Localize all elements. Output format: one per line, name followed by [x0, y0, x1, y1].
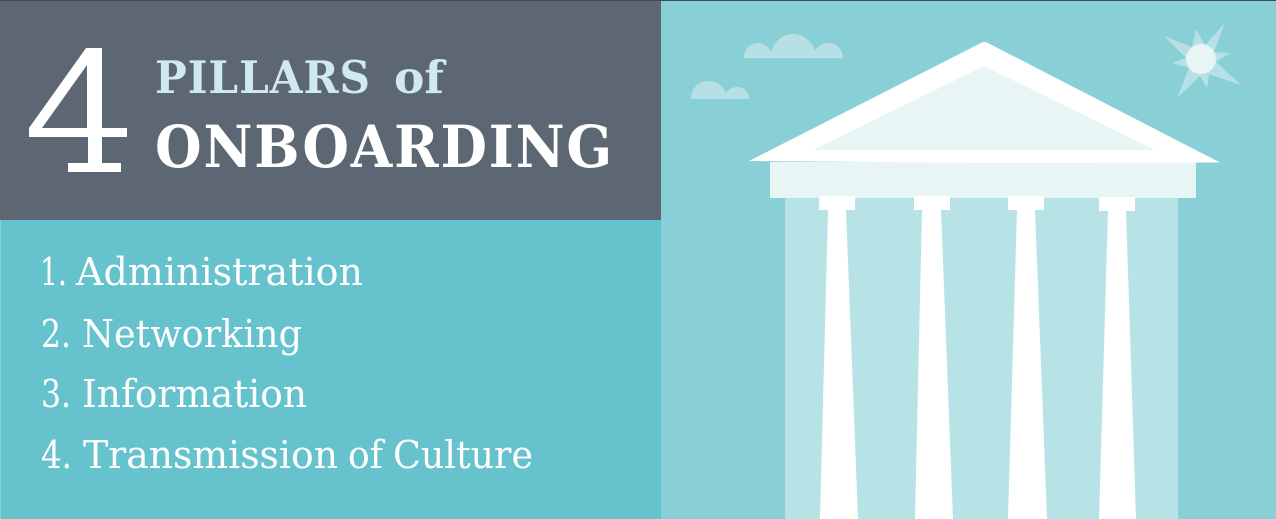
column 2: [914, 196, 953, 519]
list item 4: Culture: [393, 433, 533, 477]
list item 2: 2.: [41, 312, 71, 356]
panel: title background: [0, 1, 661, 220]
list item 4: 4.: [41, 433, 72, 477]
title line: pillars of: PILLARS: [155, 51, 371, 104]
list item 4: [41, 433, 533, 477]
temple pediment: [813, 66, 1155, 150]
list item 4: of: [348, 433, 386, 477]
temple: [749, 42, 1220, 519]
title line: pillars of: of: [394, 51, 447, 104]
panel: illustration background: [661, 0, 1276, 519]
list item 3: 3.: [41, 372, 71, 416]
icon: large cloud: [744, 34, 843, 58]
sun disc: [1186, 44, 1216, 74]
temple roof: [749, 42, 1220, 163]
icon: small cloud: [691, 81, 749, 99]
column 1: [819, 196, 858, 519]
temple entablature: [770, 162, 1196, 198]
list item 1: 1.: [40, 250, 67, 294]
title numeral 4: [29, 48, 127, 172]
column 3: [1008, 196, 1047, 519]
temple back wall: [785, 198, 1178, 519]
icon: sun: [1164, 23, 1241, 98]
sun rays: [1164, 23, 1241, 98]
title line: onboarding: ONBOARDING: [155, 113, 614, 181]
list item 2: Networking: [82, 312, 302, 356]
list item 4: Transmission: [83, 433, 338, 477]
list item 1: Administration: [75, 250, 363, 294]
pillars list: [40, 250, 533, 477]
column 4: [1099, 197, 1136, 519]
panel: pillars list background: [0, 220, 661, 519]
title: [29, 48, 614, 181]
list item 3: Information: [82, 372, 307, 416]
